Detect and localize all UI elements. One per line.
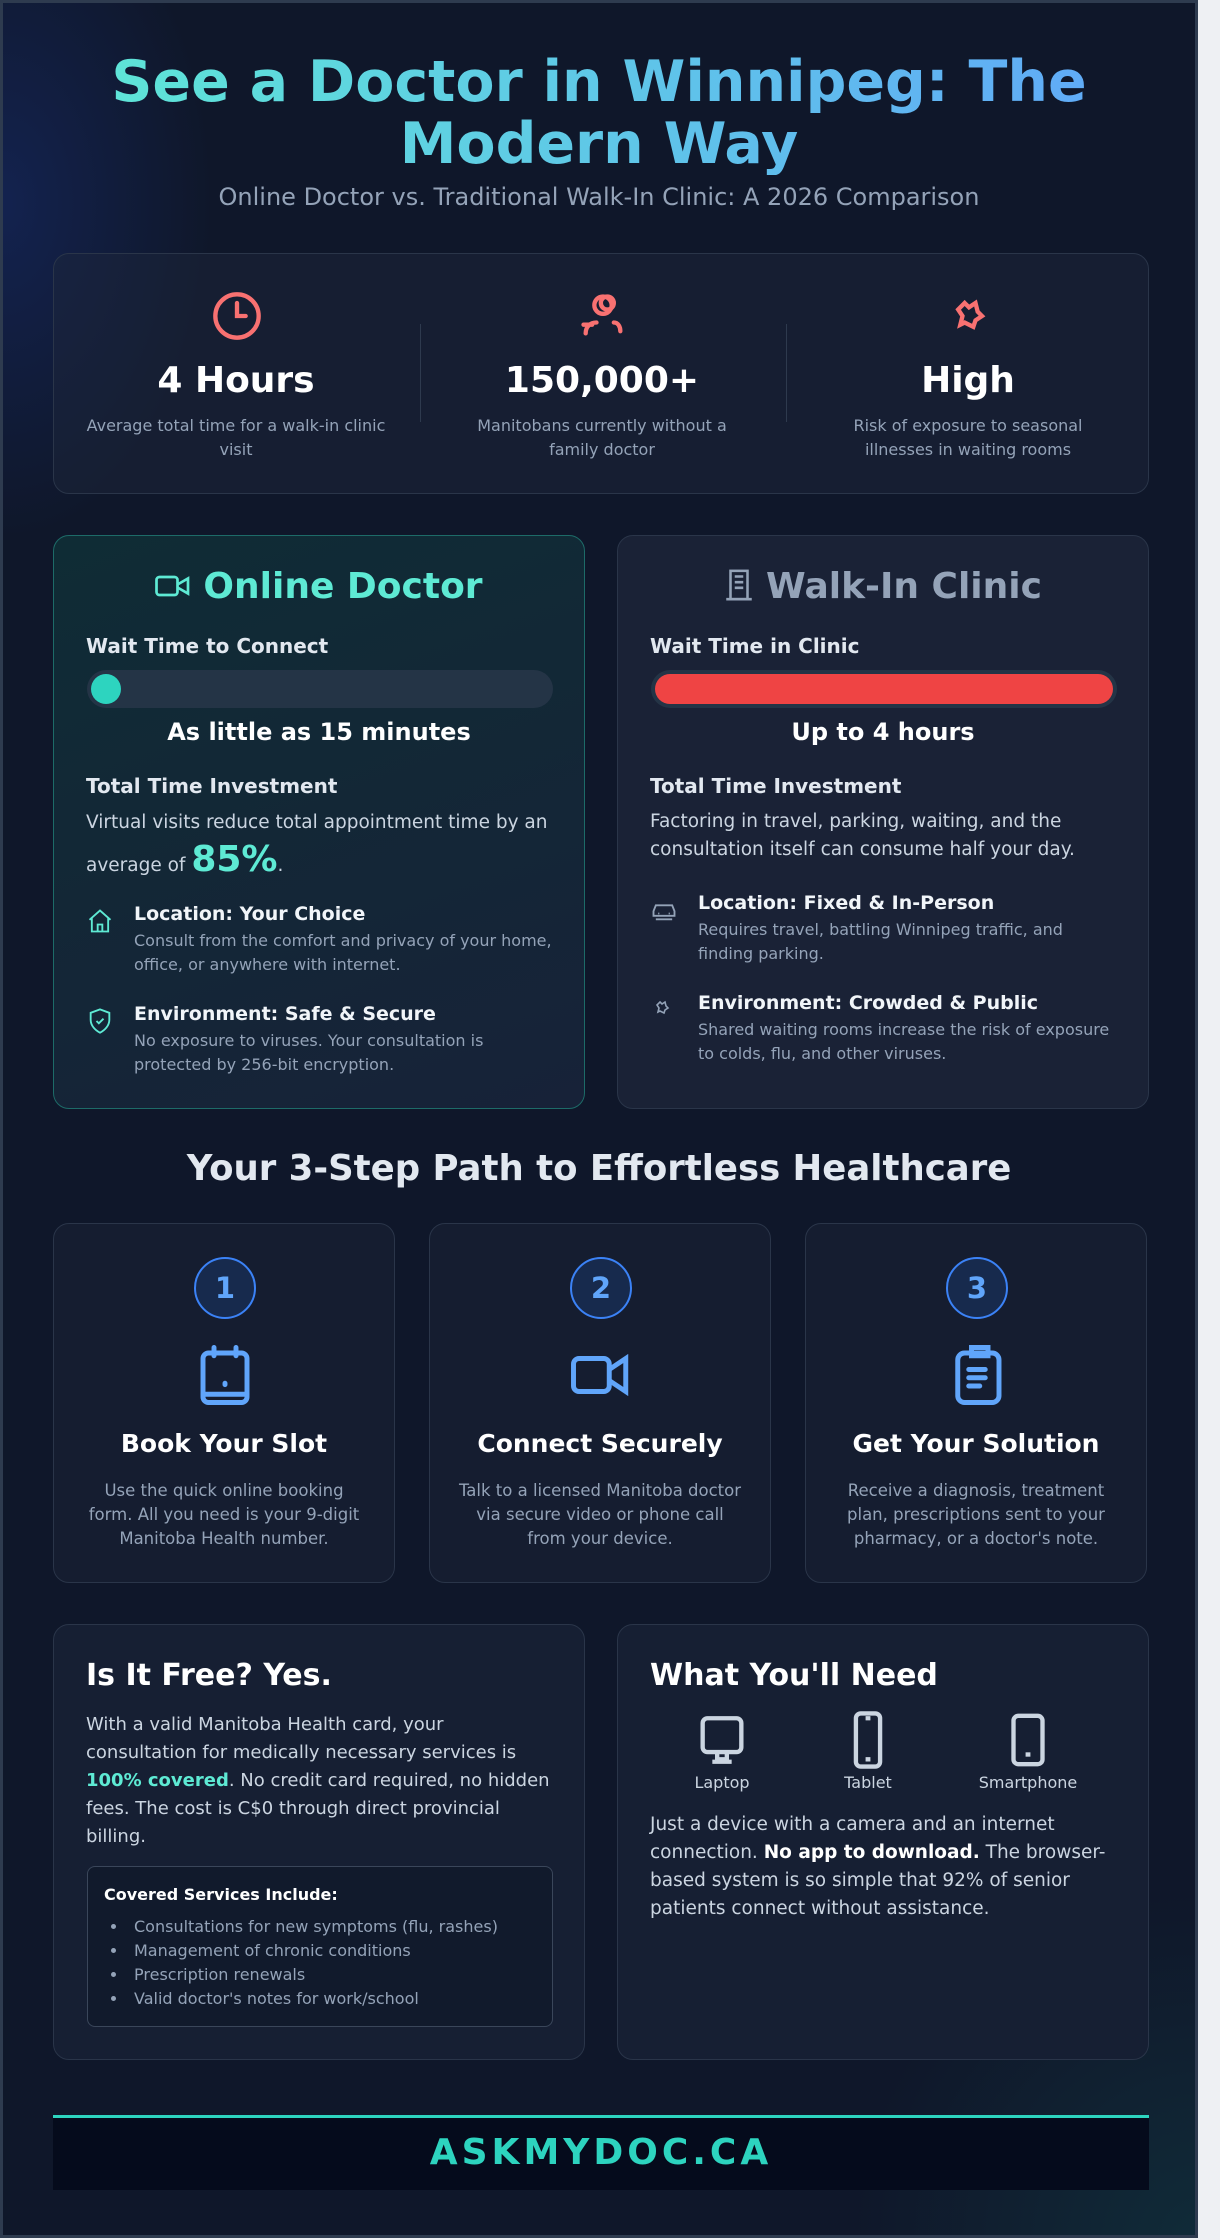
panel: online doctor: Environment: Safe & Secure [134,1003,436,1025]
box: covered services: Consultations for new symptoms (flu, rashes) [134,1917,498,1936]
icon: clock [213,292,261,340]
box: covered services: Management of chronic conditions [134,1941,411,1960]
footer: brand [53,2115,1149,2190]
bar: online wait [87,670,553,708]
text: 85%: Virtual visits reduce total appointment time by an average of 85%. [86,812,547,880]
panel: what you'll need [617,1624,1149,2060]
step 1: 1 [215,1271,235,1305]
stat: 4 hours [86,292,385,459]
text: coverage: With a valid Manitoba Health card, your consultation for medically necessary services is 100% covered. No credit card required, no hidden fees. The cost is C$0 through direct provincial billing. [86,1714,550,1847]
stat: 150,000+ [477,294,727,459]
item: environment [90,1003,483,1074]
step 3: Receive a diagnosis, treatment plan, prescriptions sent to your pharmacy, or a doctor's note. [847,1481,1105,1548]
panel: key stats: Risk of exposure to seasonal illnesses in waiting rooms [853,416,1082,459]
panel: walk-in clinic: Location: Fixed & In-Person [698,892,994,914]
label: wait in clinic: Wait Time in Clinic [650,634,859,658]
stat: high [853,300,1082,459]
icon: clipboard [955,1345,1002,1405]
title: Modern Way [400,111,798,177]
box: covered services: Covered Services Include: [104,1885,338,1904]
panel: online doctor [53,535,585,1109]
panel: walk-in clinic: Shared waiting rooms increase the risk of exposure to colds, flu, and other viruses. [698,1020,1109,1063]
icon: smartphone [979,1714,1077,1792]
value: 15 minutes: As little as 15 minutes [167,718,471,746]
icon: shield [90,1008,110,1034]
panel: key stats: Average total time for a walk-in clinic visit [87,416,385,459]
value: 4 hours: Up to 4 hours [791,718,975,746]
step 1 [53,1223,395,1583]
icon: virus small [656,1000,670,1014]
heading: free: Is It Free? Yes. [86,1658,332,1693]
icon: home [88,909,112,932]
icon: virus [955,300,986,330]
text: device: Just a device with a camera and an internet connection. No app to download. The browser-based system is so simple that 92% of senior patients connect without assistance. [650,1814,1105,1919]
panel: key stats: 150,000+ [505,360,699,401]
icon: laptop: Laptop [694,1773,750,1792]
box: covered services [87,1866,553,2027]
heading: online doctor: Online Doctor [203,566,483,607]
panel: walk-in clinic: Requires travel, battling Winnipeg traffic, and finding parking. [698,920,1063,963]
step 2: 2 [591,1271,611,1305]
icon: car [652,904,676,920]
item: crowded [656,992,1109,1063]
step 3: 3 [967,1271,987,1305]
heading: walk-in: Walk-In Clinic [766,566,1042,607]
panel: online doctor: No exposure to viruses. Your consultation is protected by 256-bit encryption. [134,1031,483,1074]
panel: key stats: 4 Hours [157,360,315,401]
title: See a Doctor in Winnipeg: The [111,49,1087,115]
icon: tablet: Tablet [844,1773,892,1792]
icon: video [571,1354,628,1396]
icon: people [581,294,622,336]
icon: smartphone: Smartphone [979,1773,1077,1792]
label: wait time: Wait Time to Connect [86,634,328,658]
subtitle: Online Doctor vs. Traditional Walk-In Clinic: A 2026 Comparison [219,183,979,211]
box: covered services: Prescription renewals [134,1965,305,1984]
panel: is it free [53,1624,585,2060]
panel: online doctor: Location: Your Choice [134,903,365,925]
panel: online doctor: Consult from the comfort and privacy of your home, office, or anywhere with internet. [134,931,552,974]
step 3: Get Your Solution [852,1429,1100,1458]
icon: calendar [200,1345,250,1405]
heading: 3-step path: Your 3-Step Path to Effortless Healthcare [187,1148,1011,1189]
step 2: Connect Securely [477,1429,723,1458]
step 1: Use the quick online booking form. All you need is your 9-digit Manitoba Health number. [89,1481,359,1548]
step 2: Talk to a licensed Manitoba doctor via secure video or phone call from your device. [459,1481,741,1548]
step 2 [429,1223,771,1583]
icon: tablet [844,1711,892,1792]
step 1: Book Your Slot [121,1429,327,1458]
panel: walk-in clinic: Environment: Crowded & Public [698,992,1038,1014]
item: location [88,903,552,974]
heading: need: What You'll Need [650,1658,938,1693]
text: half day: Factoring in travel, parking, waiting, and the consultation itself can consume half your day. [650,811,1075,860]
footer: brand: ASKMYDOC.CA [430,2132,772,2173]
bar: clinic wait [651,670,1117,708]
icon: laptop [694,1716,750,1792]
item: fixed location [652,892,1063,963]
label: total time: Total Time Investment [86,774,337,798]
title [3,51,1195,175]
panel: key stats: Manitobans currently without a family doctor [477,416,727,459]
panel: walk-in clinic [617,535,1149,1109]
label: total time: Total Time Investment [650,774,901,798]
step 3 [805,1223,1147,1583]
panel: key stats [53,253,1149,494]
box: covered services: Valid doctor's notes for work/school [134,1989,419,2008]
panel: key stats: High [921,360,1015,401]
